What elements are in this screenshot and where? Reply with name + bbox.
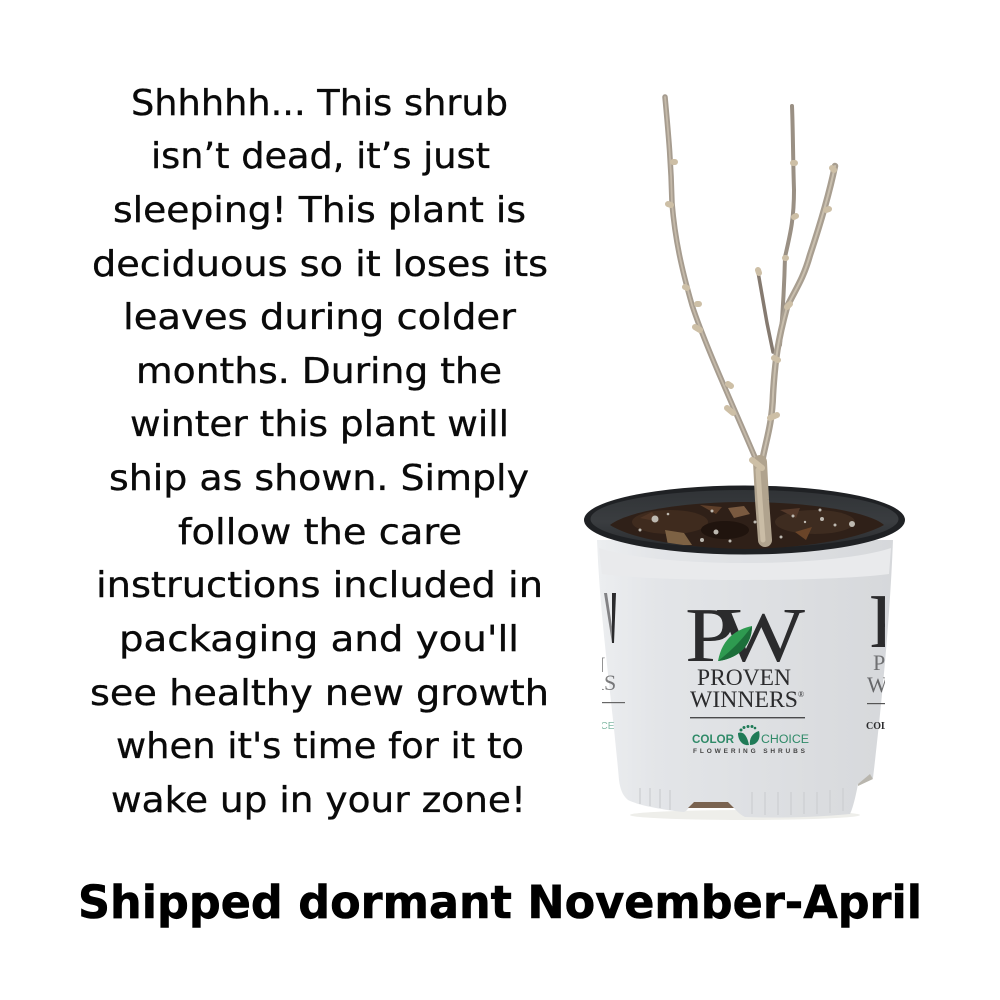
leaf bbox=[718, 626, 752, 661]
pot logo ghost right: PR bbox=[873, 650, 900, 675]
pot logo ghost right: WI bbox=[867, 672, 895, 697]
body text paragraph: when it's time for it to bbox=[116, 726, 524, 767]
shrub stems bbox=[665, 97, 835, 540]
pot logo ghost right: P bbox=[869, 578, 912, 664]
buds bbox=[668, 162, 834, 468]
body text paragraph: packaging and you'll bbox=[119, 619, 519, 660]
soil bbox=[610, 502, 884, 549]
proven winners logo: ® bbox=[798, 690, 804, 699]
proven winners logo: PROVEN bbox=[697, 665, 791, 690]
body text paragraph: see healthy new growth bbox=[90, 673, 549, 714]
right stem bbox=[762, 166, 835, 462]
body text paragraph: deciduous so it loses its bbox=[92, 244, 548, 285]
pot logo ghost left bbox=[602, 593, 625, 729]
proven winners logo bbox=[685, 592, 809, 755]
color choice flower bbox=[738, 725, 760, 745]
heading: shipped dormant: Shipped dormant November-April bbox=[78, 876, 922, 929]
body text paragraph: follow the care bbox=[178, 512, 462, 553]
body text paragraph: Shhhhh... This shrub bbox=[131, 83, 508, 124]
body text paragraph: ship as shown. Simply bbox=[109, 458, 529, 499]
body text paragraph: months. During the bbox=[136, 351, 502, 392]
pot logo ghost right bbox=[866, 596, 885, 729]
proven winners logo: FLOWERING SHRUBS bbox=[693, 748, 806, 755]
pot shadow bbox=[630, 810, 860, 820]
proven winners logo: CHOICE bbox=[761, 734, 809, 746]
left stem bbox=[665, 97, 757, 462]
proven winners logo: WINNERS bbox=[690, 687, 798, 712]
body text paragraph: instructions included in bbox=[96, 565, 543, 606]
pot base ribs bbox=[640, 788, 843, 815]
pot logo ghost left: NERS bbox=[560, 670, 616, 695]
body text paragraph: isn’t dead, it’s just bbox=[151, 136, 490, 177]
trunk bbox=[760, 462, 765, 540]
small twig bbox=[758, 272, 773, 352]
pot body bbox=[597, 540, 893, 818]
body text paragraph: winter this plant will bbox=[130, 404, 509, 445]
pot logo ghost left: VEN bbox=[560, 652, 605, 677]
proven winners logo: COLOR bbox=[692, 734, 735, 746]
proven winners logo: W bbox=[717, 592, 805, 678]
middle stem bbox=[780, 106, 794, 345]
body text paragraph: leaves during colder bbox=[123, 297, 516, 338]
pot logo ghost left: OICE bbox=[590, 721, 615, 732]
body text paragraph: sleeping! This plant is bbox=[113, 190, 526, 231]
pot logo ghost right: COL bbox=[866, 721, 888, 732]
potted dormant shrub photo bbox=[560, 97, 912, 820]
pot rim bbox=[584, 486, 905, 554]
body text paragraph: wake up in your zone! bbox=[111, 780, 526, 821]
body text paragraph bbox=[90, 83, 549, 821]
proven winners logo: P bbox=[685, 592, 735, 678]
